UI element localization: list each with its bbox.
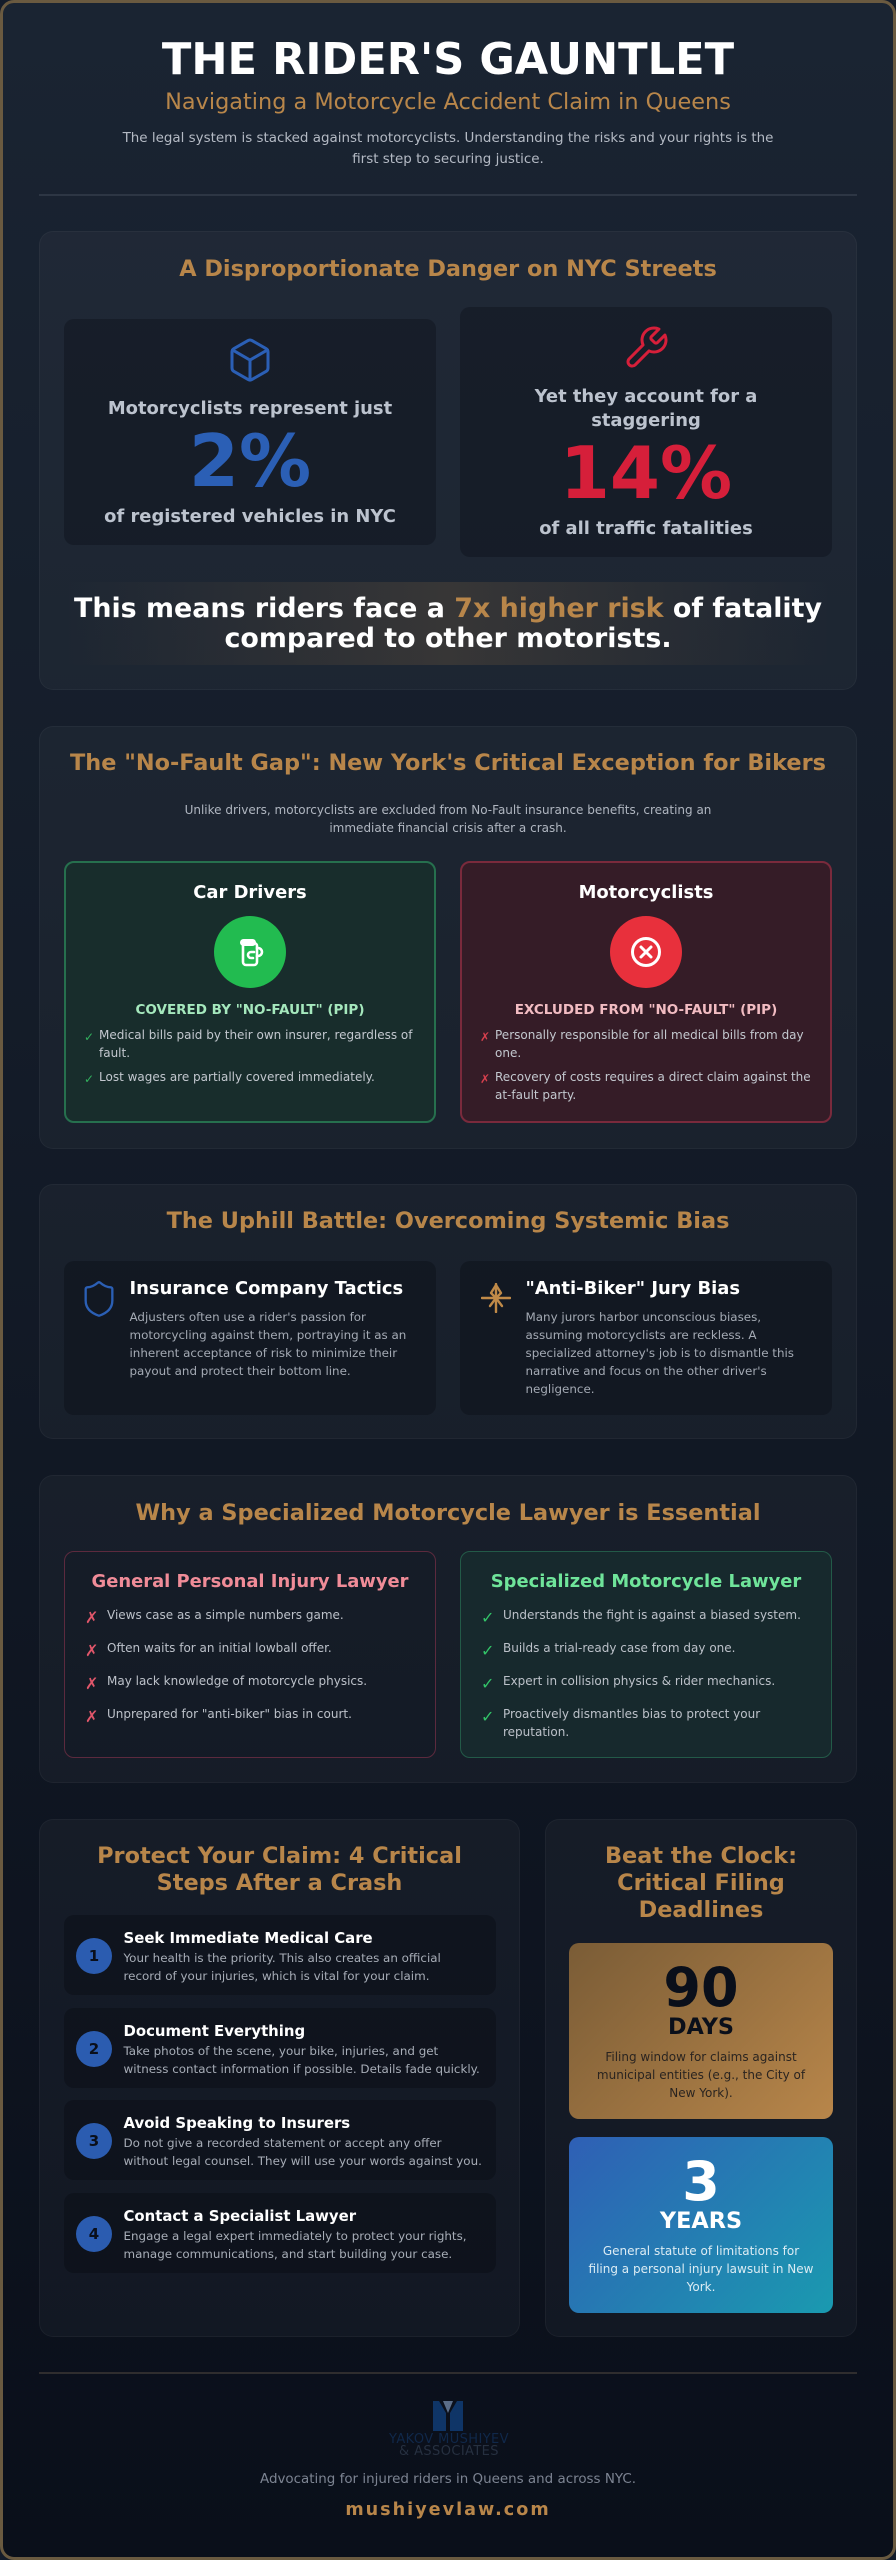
exclusion one (495, 1028, 804, 1060)
step title: Document Everything (124, 2022, 305, 2040)
callout: 7x risk: This means riders face a 7x higher risk of fatality (74, 593, 822, 624)
description: New York). (669, 2086, 733, 2100)
card body: payout and protect their bottom line. (130, 1364, 351, 1378)
icon: gold emblem (481, 1283, 511, 1313)
intro text: immediate financial crisis after a crash. (329, 821, 567, 835)
step title: Contact a Specialist Lawyer (124, 2207, 356, 2225)
card: jury bias (460, 1261, 832, 1415)
step number: 3 (89, 2132, 99, 2150)
card: general lawyer (64, 1551, 436, 1758)
step 4 (64, 2193, 496, 2273)
step body (123, 2044, 480, 2076)
icon: cube (230, 338, 270, 382)
item mark: ✗ (85, 1608, 98, 1627)
footer tagline: Advocating for injured riders in Queens and across NYC. (260, 2472, 636, 2487)
deadline card: 90 days (569, 1943, 833, 2119)
step body: record of your injuries, which is vital for your claim. (124, 1969, 429, 1983)
benefit one: fault. (99, 1046, 130, 1060)
heading: Protect Your Claim: 4 Critical (97, 1843, 462, 1869)
item text: Understands the fight is against a biased system. (503, 1608, 801, 1622)
website: mushiyevlaw.com (345, 2500, 551, 2520)
stat label: staggering (591, 410, 701, 431)
heading (605, 1843, 797, 1923)
step 3 (64, 2100, 496, 2180)
heading: The "No-Fault Gap": New York's Critical Exception for Bikers (70, 750, 826, 776)
exclusion two: at-fault party. (495, 1088, 576, 1102)
heading: A Disproportionate Danger on NYC Streets (179, 256, 717, 282)
card body: Many jurors harbor unconscious biases, (526, 1310, 761, 1324)
header (39, 35, 857, 196)
card body: assuming motorcyclists are reckless. A (526, 1328, 757, 1342)
item text: reputation. (503, 1725, 569, 1739)
big number: 90 (663, 1956, 739, 2019)
check mark: ✓ (84, 1030, 94, 1044)
heading: Steps After a Crash (157, 1870, 402, 1896)
icon: shield (84, 1281, 114, 1317)
cross mark: ✗ (480, 1072, 490, 1086)
description: General statute of limitations for (603, 2244, 799, 2258)
item text: Often waits for an initial lowball offer. (107, 1641, 332, 1655)
step number: 1 (89, 1947, 99, 1965)
card body: narrative and focus on the other driver's (526, 1364, 767, 1378)
unit: YEARS (660, 2208, 742, 2234)
description (588, 2244, 813, 2294)
card: motorcyclists (460, 861, 832, 1123)
exclusion list (480, 1028, 811, 1102)
benefit two: Lost wages are partially covered immediately. (99, 1070, 375, 1084)
status label: COVERED BY "NO-FAULT" (PIP) (135, 1002, 365, 1018)
unit: DAYS (668, 2014, 734, 2040)
card body: negligence. (526, 1382, 595, 1396)
footer (39, 2372, 857, 2520)
benefit list (84, 1028, 413, 1086)
step body: manage communications, and start building your case. (124, 2247, 452, 2261)
benefit one: Medical bills paid by their own insurer, regardless of (99, 1028, 412, 1042)
step number (76, 1938, 112, 1974)
item text: May lack knowledge of motorcycle physics. (107, 1674, 367, 1688)
exclusion two (495, 1070, 811, 1102)
intro text: first step to securing justice. (352, 152, 544, 167)
card title: "Anti-Biker" Jury Bias (526, 1278, 740, 1299)
stat number: 2% (189, 419, 311, 503)
cross mark: ✗ (480, 1030, 490, 1044)
card title: Specialized Motorcycle Lawyer (491, 1571, 801, 1592)
item mark: ✗ (85, 1674, 98, 1693)
callout: 7x risk: compared to other motorists. (224, 623, 672, 654)
item mark: ✓ (481, 1608, 494, 1627)
step title: Seek Immediate Medical Care (124, 1929, 373, 1947)
icon: green circle with cup (214, 916, 286, 988)
panel: disproportionate danger (39, 231, 857, 690)
step number: 4 (89, 2225, 99, 2243)
exclusion one: one. (495, 1046, 521, 1060)
item text (503, 1707, 760, 1739)
description (597, 2050, 806, 2100)
item mark: ✓ (481, 1641, 494, 1660)
step body: Take photos of the scene, your bike, injuries, and get (124, 2044, 438, 2058)
heading: Deadlines (639, 1897, 763, 1923)
stat number: 14% (560, 431, 732, 515)
stat caption: of all traffic fatalities (539, 518, 753, 539)
step body: Your health is the priority. This also creates an official (124, 1951, 441, 1965)
step body: without legal counsel. They will use your words against you. (124, 2154, 482, 2168)
stat card: 2 percent (64, 319, 436, 545)
card body (130, 1310, 406, 1378)
step body: witness contact information if possible. Details fade quickly. (124, 2062, 480, 2076)
logo name: YAKOV MUSHIYEV (389, 2432, 509, 2447)
step body (124, 2229, 467, 2261)
benefit one (99, 1028, 413, 1060)
step body (124, 1951, 441, 1983)
panel: systemic bias (39, 1184, 857, 1439)
step body (124, 2136, 482, 2168)
intro text: The legal system is stacked against motorcyclists. Understanding the risks and your rights is the (123, 131, 773, 146)
step 2 (64, 2008, 496, 2088)
item mark: ✓ (481, 1707, 494, 1726)
heading (97, 1843, 462, 1896)
step 1 (64, 1915, 496, 1995)
card: specialized lawyer (460, 1551, 832, 1758)
description: filing a personal injury lawsuit in New (589, 2262, 813, 2276)
item mark: ✗ (85, 1707, 98, 1726)
callout: 7x risk (64, 582, 832, 665)
card body: Adjusters often use a rider's passion for (130, 1310, 366, 1324)
stat label: Yet they account for a (535, 386, 757, 407)
card: car drivers (64, 861, 436, 1123)
panel: critical steps (39, 1819, 520, 2337)
card: insurance tactics (64, 1261, 436, 1415)
panel: no-fault gap (39, 726, 857, 1149)
description: Filing window for claims against (605, 2050, 797, 2064)
intro text (185, 803, 711, 835)
stat label (534, 386, 757, 431)
step number (76, 2031, 112, 2067)
card body: motorcycling against them, portraying it as an (130, 1328, 406, 1342)
item mark: ✓ (481, 1674, 494, 1693)
step body: Do not give a recorded statement or accept any offer (124, 2136, 442, 2150)
intro text: Unlike drivers, motorcyclists are excluded from No-Fault insurance benefits, creating an (185, 803, 711, 817)
title: THE RIDER'S GAUNTLET (162, 35, 734, 85)
step title: Avoid Speaking to Insurers (124, 2114, 350, 2132)
icon: wrench (626, 326, 668, 368)
step body: Engage a legal expert immediately to protect your rights, (124, 2229, 467, 2243)
item text: Proactively dismantles bias to protect your (503, 1707, 760, 1721)
icon: red circle with x (610, 916, 682, 988)
step number (76, 2216, 112, 2252)
panel: specialized lawyer comparison (39, 1475, 857, 1783)
big number: 3 (682, 2150, 720, 2213)
description: municipal entities (e.g., the City of (597, 2068, 805, 2082)
description: York. (687, 2280, 715, 2294)
item text: Builds a trial-ready case from day one. (503, 1641, 735, 1655)
step number: 2 (89, 2040, 99, 2058)
exclusion two: Recovery of costs requires a direct claim against the (495, 1070, 811, 1084)
heading: Why a Specialized Motorcycle Lawyer is Essential (135, 1500, 761, 1526)
item text: Views case as a simple numbers game. (107, 1608, 344, 1622)
check mark: ✓ (84, 1072, 94, 1086)
panel: filing deadlines (545, 1819, 857, 2337)
deadline card: 3 years (569, 2137, 833, 2313)
exclusion one: Personally responsible for all medical bills from day (495, 1028, 804, 1042)
stat caption: of registered vehicles in NYC (104, 506, 396, 527)
card title: General Personal Injury Lawyer (92, 1571, 408, 1592)
heading: Critical Filing (617, 1870, 785, 1896)
stat label: Motorcyclists represent just (108, 398, 392, 419)
item text: Expert in collision physics & rider mechanics. (503, 1674, 775, 1688)
card title: Insurance Company Tactics (130, 1278, 403, 1299)
stat card: 14 percent (460, 307, 832, 557)
heading: The Uphill Battle: Overcoming Systemic Bias (167, 1208, 729, 1234)
heading: Beat the Clock: (605, 1843, 797, 1869)
card body (526, 1310, 794, 1396)
logo subtitle: & ASSOCIATES (399, 2444, 499, 2459)
item text: Unprepared for "anti-biker" bias in court. (107, 1707, 352, 1721)
card body: inherent acceptance of risk to minimize their (130, 1346, 397, 1360)
logo (389, 2401, 509, 2459)
item mark: ✗ (85, 1641, 98, 1660)
card title: Motorcyclists (579, 882, 713, 903)
status label: EXCLUDED FROM "NO-FAULT" (PIP) (515, 1002, 777, 1018)
card title: Car Drivers (193, 882, 307, 903)
subtitle: Navigating a Motorcycle Accident Claim in Queens (165, 89, 731, 115)
step number (76, 2123, 112, 2159)
logo mark (433, 2401, 463, 2431)
intro text (122, 131, 773, 167)
card body: specialized attorney's job is to dismantle this (526, 1346, 794, 1360)
